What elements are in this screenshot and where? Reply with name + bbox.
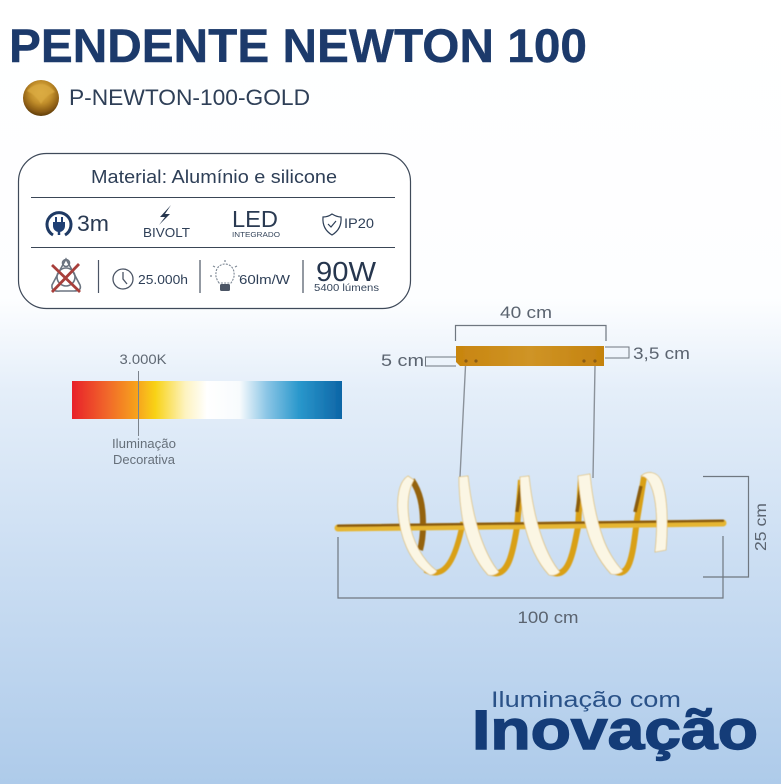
- material text: Material: Alumínio e silicone: [91, 167, 337, 187]
- integrated label: INTEGRADO: [232, 230, 280, 239]
- front light strips: [398, 473, 667, 575]
- spiral lamp body: [338, 473, 723, 575]
- product code: P-NEWTON-100-GOLD: [69, 85, 310, 110]
- divider: [199, 260, 201, 293]
- efficacy: 60lm/W: [239, 272, 291, 287]
- depth label: 5 cm: [381, 351, 424, 370]
- ip rating: IP20: [344, 215, 374, 231]
- LED label: LED: [232, 206, 278, 232]
- overall height label: 25 cm: [753, 503, 770, 551]
- back gold coils: [412, 477, 644, 573]
- panel: specifications: [18, 154, 410, 308]
- temperature marker: [138, 371, 140, 436]
- width label: 40 cm: [500, 303, 552, 322]
- divider: [98, 260, 100, 293]
- slogan first line: Iluminação com: [491, 687, 681, 712]
- icon: gold colour swatch: [23, 80, 59, 116]
- lifetime: 25.000h: [138, 272, 188, 287]
- height label: 3,5 cm: [633, 344, 690, 363]
- product code with gold swatch: [23, 80, 310, 116]
- slogan second line: Inovação: [472, 698, 758, 761]
- icon: lightning bolt: [159, 205, 171, 225]
- icon: crossed out triangle symbol: [52, 259, 80, 292]
- dark highlights on back coils: [517, 485, 641, 512]
- ceiling canopy width dimension: [456, 326, 606, 341]
- overall width dimension: [338, 536, 723, 598]
- spectrum bar: [72, 381, 342, 419]
- overall width label: 100 cm: [518, 608, 578, 627]
- canopy depth dimension: [426, 357, 456, 366]
- suspension cables: [460, 366, 595, 478]
- icon: plug cable: [47, 213, 71, 235]
- usage label second line: Decorativa: [113, 452, 176, 467]
- lumens: 5400 lúmens: [314, 282, 379, 294]
- overall height dimension: [703, 476, 748, 577]
- icon: shield check: [323, 214, 341, 235]
- usage label: Iluminação: [112, 436, 176, 451]
- icon: clock: [113, 269, 133, 289]
- power: 90W: [316, 256, 377, 287]
- temperature label: 3.000K: [120, 351, 167, 367]
- horizontal rod: [338, 521, 723, 528]
- divider: [302, 260, 304, 293]
- pendant lamp diagram: [338, 303, 770, 627]
- colour temperature scale: [72, 351, 342, 467]
- canopy: [456, 346, 604, 366]
- bivolt label: BIVOLT: [143, 225, 190, 240]
- canopy height dimension: [605, 347, 629, 358]
- icon: light bulb: [210, 260, 240, 291]
- title: PENDENTE NEWTON 100: [9, 19, 587, 72]
- brand slogan: [472, 687, 758, 761]
- cable length: 3m: [77, 211, 109, 236]
